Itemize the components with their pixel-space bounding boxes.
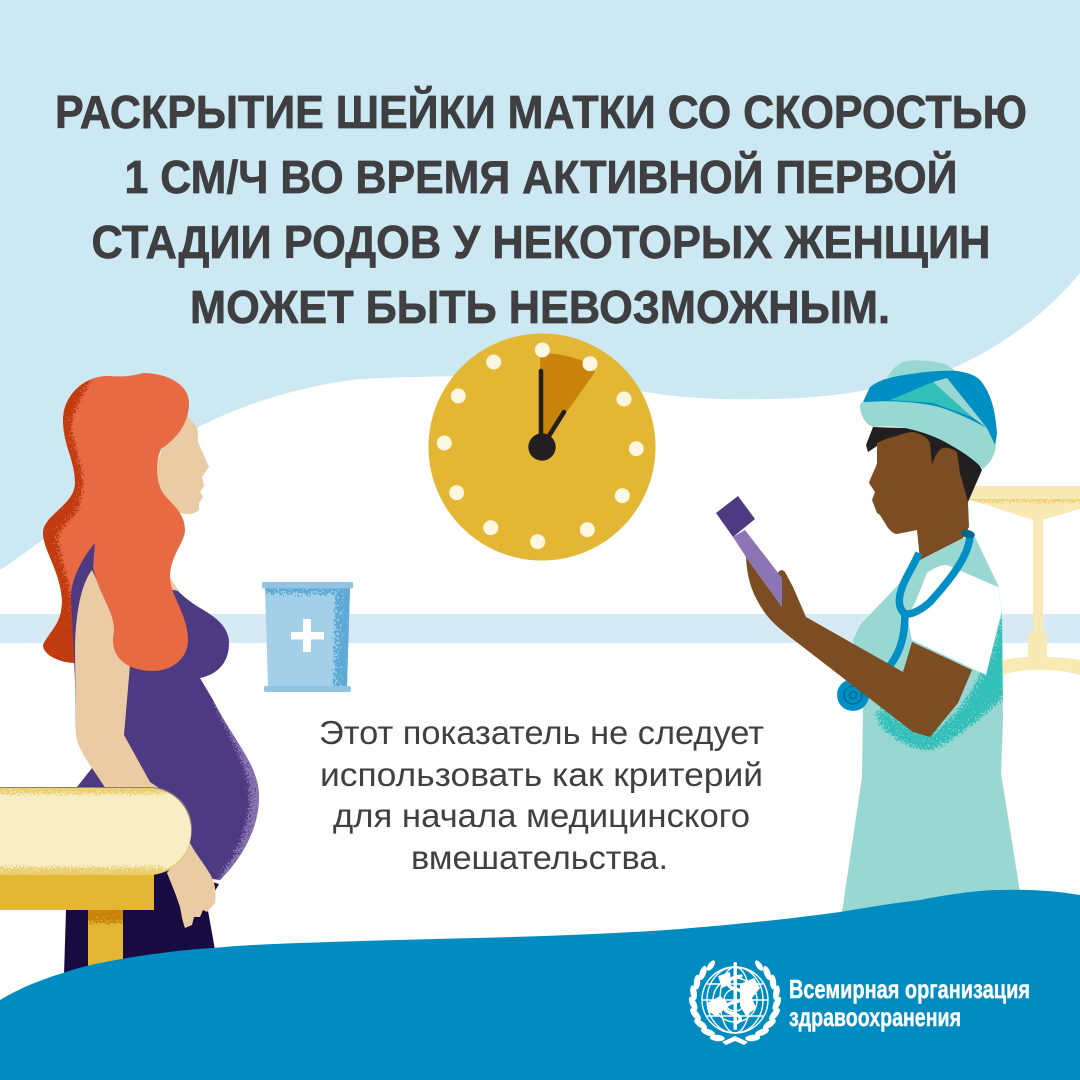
neck bbox=[160, 570, 179, 596]
bed cushion bbox=[0, 787, 192, 875]
bed leg bbox=[88, 910, 123, 966]
surgical cap bbox=[860, 360, 997, 469]
bed base bbox=[0, 873, 154, 910]
skirt bbox=[64, 868, 219, 975]
back hair bbox=[43, 373, 143, 663]
body text: вмешательства. bbox=[411, 839, 668, 876]
hair bbox=[866, 427, 982, 502]
icon: clock bbox=[428, 334, 656, 560]
title: МОЖЕТ БЫТЬ НЕВОЗМОЖНЫМ. bbox=[190, 281, 890, 333]
illustration: pregnant woman at bed bbox=[0, 373, 259, 973]
body text: Этот показатель не следует bbox=[319, 714, 764, 751]
sleeve bbox=[907, 565, 1002, 675]
face and neck bbox=[869, 432, 969, 560]
belly shading bbox=[212, 703, 259, 880]
staff and snake bbox=[734, 962, 737, 1030]
test tube bbox=[716, 496, 782, 607]
laurels bbox=[687, 959, 725, 1042]
bottom wave bbox=[0, 890, 1080, 1080]
WHO logo emblem bbox=[687, 959, 783, 1045]
WHO logo text bbox=[789, 974, 1030, 1032]
arm and hand bbox=[746, 557, 985, 737]
title bbox=[55, 86, 1027, 333]
body text: для начала медицинского bbox=[333, 797, 750, 834]
hand bbox=[167, 843, 216, 928]
front hair bbox=[93, 373, 189, 671]
dress bbox=[71, 543, 259, 880]
icon: medical bucket bbox=[262, 582, 353, 692]
continents bbox=[707, 996, 727, 1016]
illustration: side table bbox=[969, 486, 1080, 675]
illustration: health worker bbox=[716, 360, 1020, 912]
title: 1 СМ/Ч ВО ВРЕМЯ АКТИВНОЙ ПЕРВОЙ bbox=[124, 151, 958, 203]
body text: использовать как критерий bbox=[320, 756, 763, 793]
stethoscope bbox=[837, 528, 976, 711]
title: СТАДИИ РОДОВ У НЕКОТОРЫХ ЖЕНЩИН bbox=[92, 216, 990, 268]
WHO logo text: здравоохранения bbox=[789, 1002, 961, 1032]
arm bbox=[75, 570, 165, 792]
scrubs bbox=[842, 537, 1020, 912]
title: РАСКРЫТИЕ ШЕЙКИ МАТКИ СО СКОРОСТЬЮ bbox=[55, 86, 1027, 138]
body text bbox=[319, 714, 764, 876]
woman face bbox=[150, 408, 209, 514]
